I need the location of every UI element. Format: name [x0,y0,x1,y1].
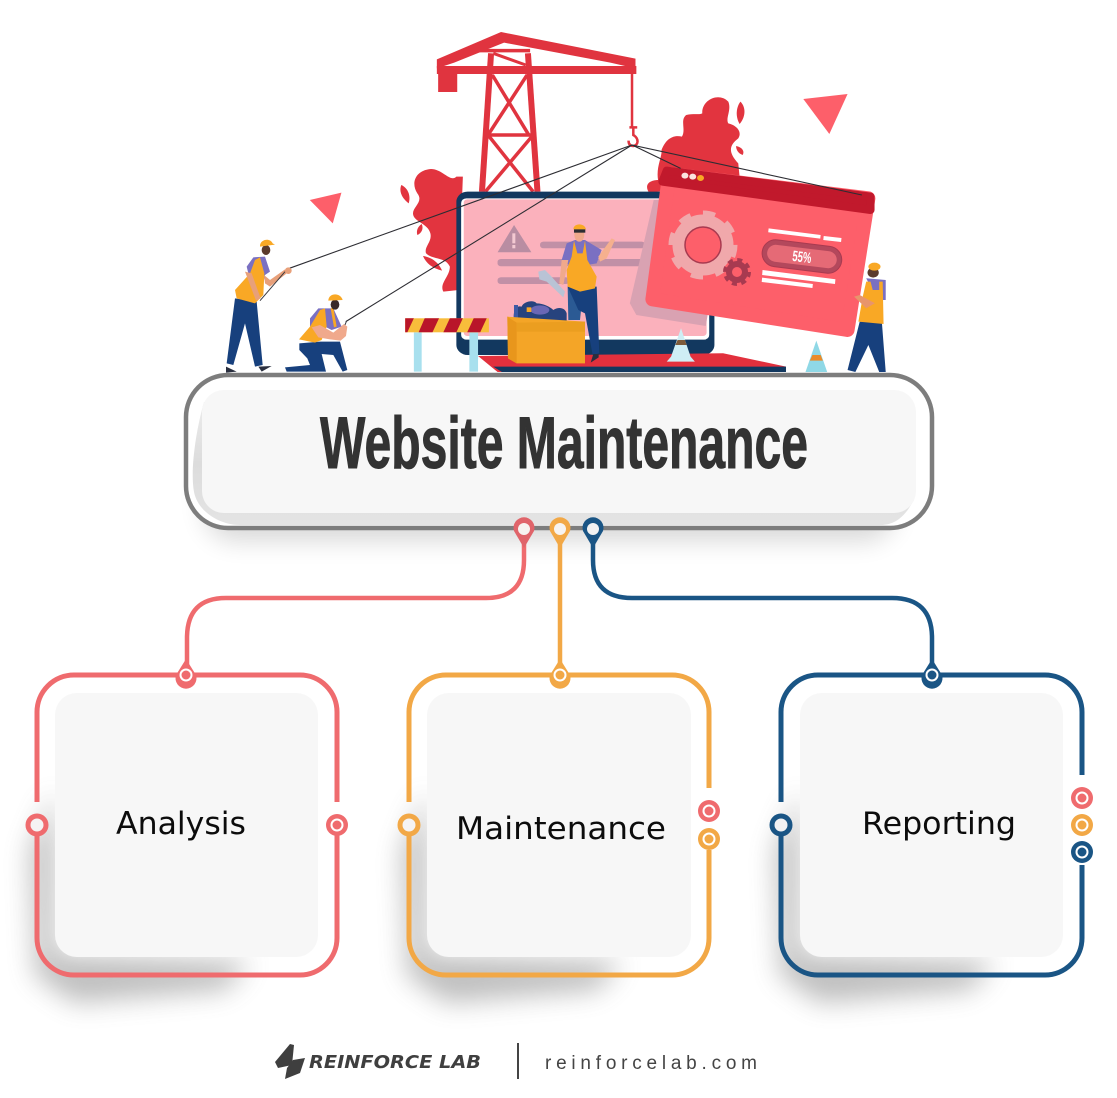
tools in box [514,301,567,322]
decorative triangle right [803,94,848,134]
panel: analysis [28,659,348,1003]
maintenance left node [400,816,418,834]
title panel [186,375,932,540]
cone right [805,341,827,372]
window shadow [630,200,708,326]
worker kneeling [285,294,347,372]
reporting frame [781,675,1082,975]
panel: reporting [772,659,1093,1003]
maintenance top node [550,659,570,689]
tower crane [474,51,632,192]
website url: reinforcelab.com [545,1053,757,1074]
reporting card [800,693,1063,957]
hanging ropes [289,145,862,322]
maintenance card shadow [402,790,622,1003]
reporting right nodes [1071,787,1093,863]
warning icon on screen [498,225,531,252]
reporting label: Reporting [862,806,1016,842]
connector: red [187,517,534,668]
connector: orange [550,517,570,668]
back leg [568,287,583,320]
crane jib, beam and counterweight [437,32,636,92]
worker standing left [226,240,292,373]
maintenance label: Maintenance [456,811,666,847]
analysis left node [28,816,46,834]
analysis frame [37,675,337,975]
footer divider [517,1043,519,1079]
analysis label: Analysis [116,806,246,842]
plant blob left [400,169,463,292]
analysis top node [176,659,196,689]
progress pill [761,238,843,275]
window text lines [762,228,841,288]
panel: maintenance [400,659,720,1003]
barrier [405,318,489,372]
crane hook [629,127,638,146]
toolbox [507,317,585,363]
analysis card shadow [30,790,250,1003]
analysis card [55,693,318,957]
hero illustration [226,32,886,373]
title: Website Maintenance [320,403,808,484]
toolbox and centre worker [507,224,615,363]
screen text bars [498,242,646,284]
plant blob right [647,97,744,193]
maintenance frame [409,675,709,975]
reporting top node [921,659,942,689]
laptop base [478,353,786,372]
connector: blue [582,517,932,668]
decorative triangle left [310,193,341,223]
progress pill: 55% [791,248,812,267]
small gear [725,260,749,284]
maintenance right nodes [698,800,720,850]
laptop screen [456,192,714,355]
reporting left node [772,816,790,834]
logo wordmark: REINFORCE LAB [309,1052,481,1073]
centre worker body [559,224,615,363]
maintenance card [427,693,691,957]
scene backdrop [289,32,886,372]
reporting card shadow [775,790,995,1003]
cone on laptop [667,328,695,362]
worker right [848,263,886,372]
logo mark [275,1044,305,1079]
large gear [672,214,734,276]
footer logo and url [275,1043,757,1079]
analysis right node [326,814,348,836]
settings window [652,171,871,330]
wrench on screen [538,270,565,297]
